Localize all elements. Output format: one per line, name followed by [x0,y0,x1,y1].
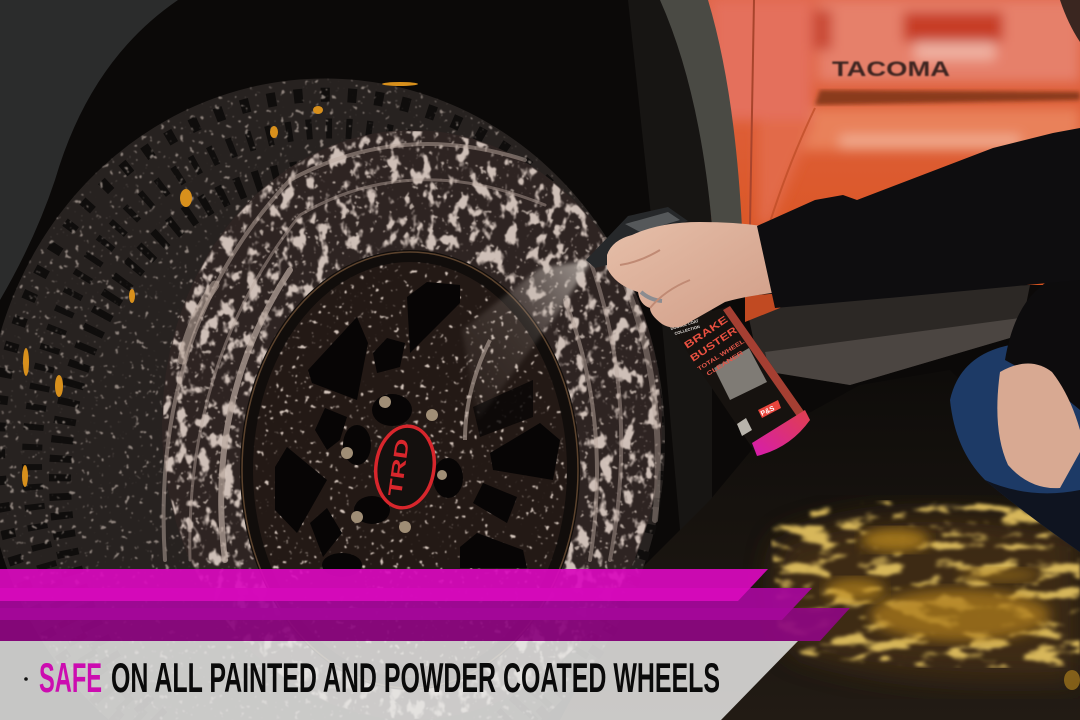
lug nuts [341,396,447,533]
second hand and jeans at right [950,280,1080,552]
tire tread [0,78,665,720]
foam streaks [164,144,658,560]
spray mist [462,260,592,420]
label text [670,314,781,436]
middle stripe [0,588,812,620]
label text: COLLECTION [674,324,700,336]
upper stripe [0,569,768,601]
bullet dot [24,677,28,681]
person hair at top right [1060,0,1080,42]
label text: BRAKE [683,314,731,351]
text panel: translucent white [0,641,798,720]
TRD center cap: TRD [385,437,414,498]
label text: BUSTER [689,325,740,364]
truck orange body panel [705,0,1080,285]
tire sidewall with foam [162,130,662,720]
label text: DOUBLE COAT [670,318,700,331]
label text: CLEANER [706,350,745,378]
caption: safe on all painted and powder coated wheels [24,654,720,701]
left fender [0,0,178,300]
right fender lip [655,0,742,228]
bottle trigger head [586,207,688,268]
TRD center cap [371,422,439,512]
yellow tread markers [22,82,418,487]
badge: TACOMA: TACOMA [832,58,950,81]
rim window holes [275,282,560,577]
label text: P&S [760,405,776,418]
label photo [714,348,767,400]
body reflections [712,0,1080,225]
spray bottle [586,207,810,456]
wheel rim [240,250,580,690]
hand holding bottle [607,222,780,328]
label text: TOTAL WHEEL [697,339,746,373]
bottle body [668,306,810,455]
tread blocks [32,128,632,720]
running board [745,285,1030,385]
pink liquid base [752,410,810,456]
lower stripe [0,608,850,641]
sleeve of black sweater [757,128,1080,308]
banner: magenta stripes [0,569,850,641]
ground with fallen yellow leaves [560,370,1080,720]
highlight word: SAFE [39,654,102,701]
